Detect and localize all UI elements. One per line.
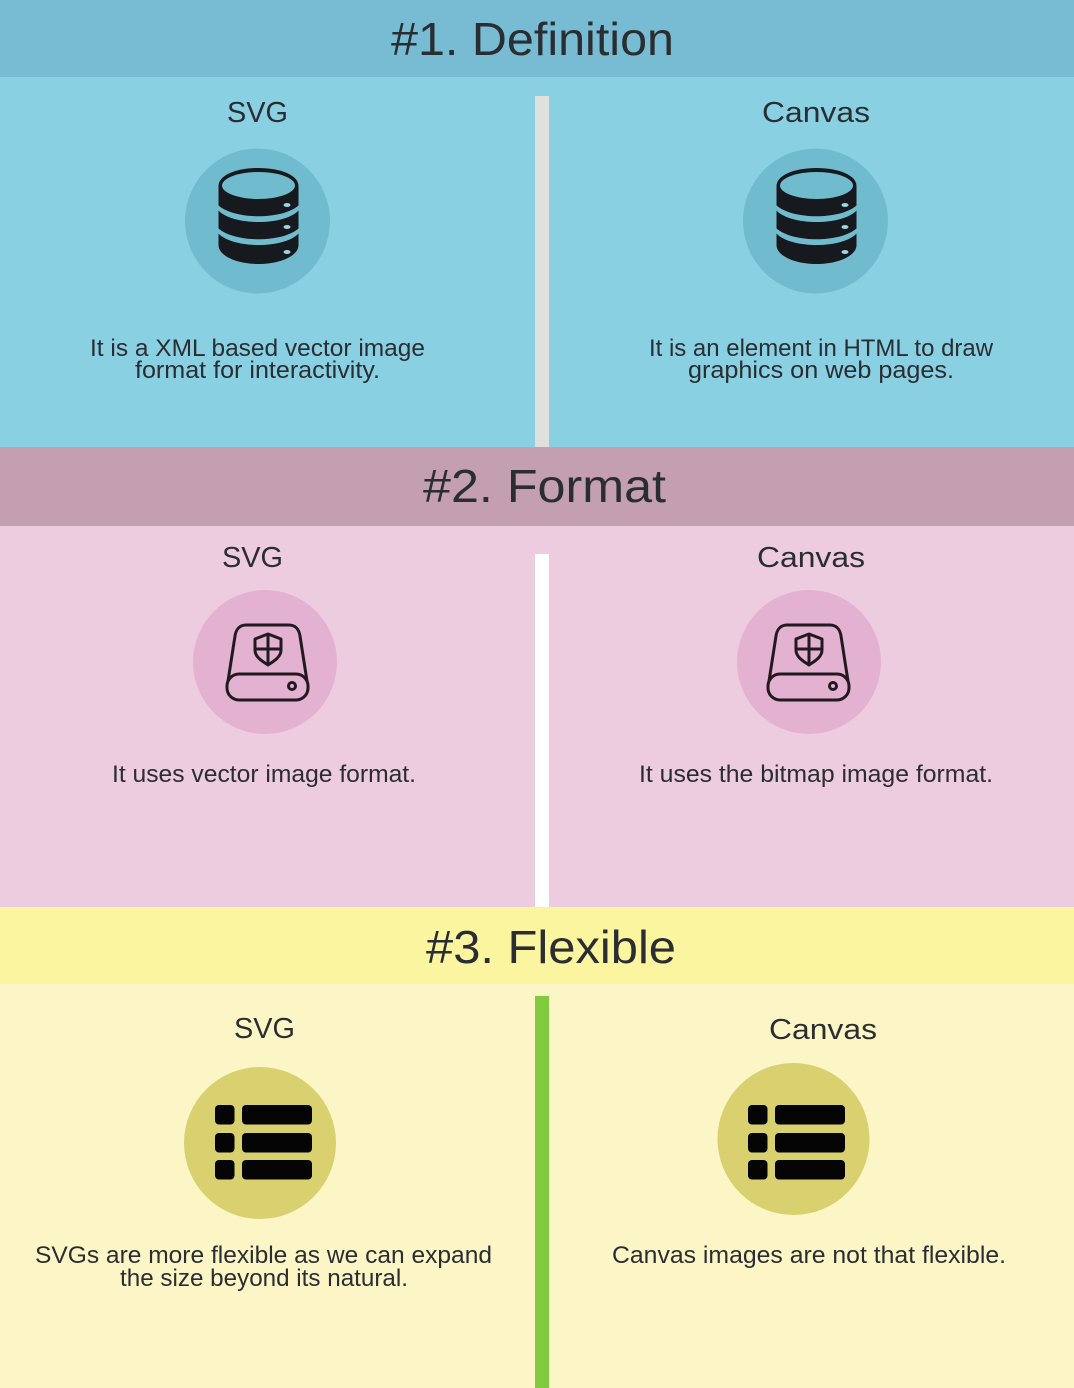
SVG column label: SVG — [227, 97, 288, 129]
text: Canvas format: It uses the bitmap image format. — [639, 761, 993, 788]
text: SVG definition: It is a XML based vector image — [90, 335, 425, 362]
text: SVG format: It uses vector image format. — [112, 761, 416, 788]
text: SVG definition: format for interactivity. — [135, 357, 380, 384]
Canvas column label: Canvas — [762, 97, 870, 129]
heading bar: definition — [0, 0, 1074, 77]
text: Canvas definition — [649, 335, 994, 384]
icon: list, Canvas column — [718, 1063, 870, 1215]
SVG column label: SVG — [234, 1013, 295, 1045]
text: SVG flexible: SVGs are more flexible as we can expand — [35, 1242, 492, 1269]
section 3: flexible — [0, 907, 1074, 1388]
text: SVG definition — [90, 335, 425, 384]
heading: flexible: #3. Flexible — [426, 921, 676, 973]
panel background: format — [0, 526, 1074, 907]
heading bar: flexible — [0, 907, 1074, 984]
text: SVG flexible — [35, 1242, 492, 1292]
text: Canvas definition: It is an element in HTML to draw — [649, 335, 994, 362]
icon: database, Canvas column — [743, 148, 888, 294]
heading: definition: #1. Definition — [391, 13, 674, 65]
section 2: format — [0, 447, 1074, 907]
text: SVG flexible: the size beyond its natural. — [120, 1265, 408, 1292]
icon: database, SVG column — [185, 148, 330, 294]
icon: list, SVG column — [184, 1067, 336, 1219]
section 1: definition — [0, 0, 1074, 447]
heading: format: #2. Format — [423, 460, 666, 512]
SVG column label: SVG — [222, 542, 283, 574]
Canvas column label: Canvas — [769, 1014, 877, 1046]
center divider: flexible — [535, 996, 549, 1388]
panel background: flexible — [0, 984, 1074, 1388]
text: Canvas flexible: Canvas images are not that flexible. — [612, 1242, 1006, 1269]
heading bar: format — [0, 447, 1074, 526]
icon: secure drive, Canvas column — [737, 590, 881, 734]
icon: secure drive, SVG column — [193, 590, 337, 734]
text: Canvas definition: graphics on web pages. — [688, 357, 954, 384]
panel background: definition — [0, 77, 1074, 447]
center divider: format — [535, 554, 549, 907]
center divider: definition — [535, 96, 549, 447]
Canvas column label: Canvas — [757, 542, 865, 574]
